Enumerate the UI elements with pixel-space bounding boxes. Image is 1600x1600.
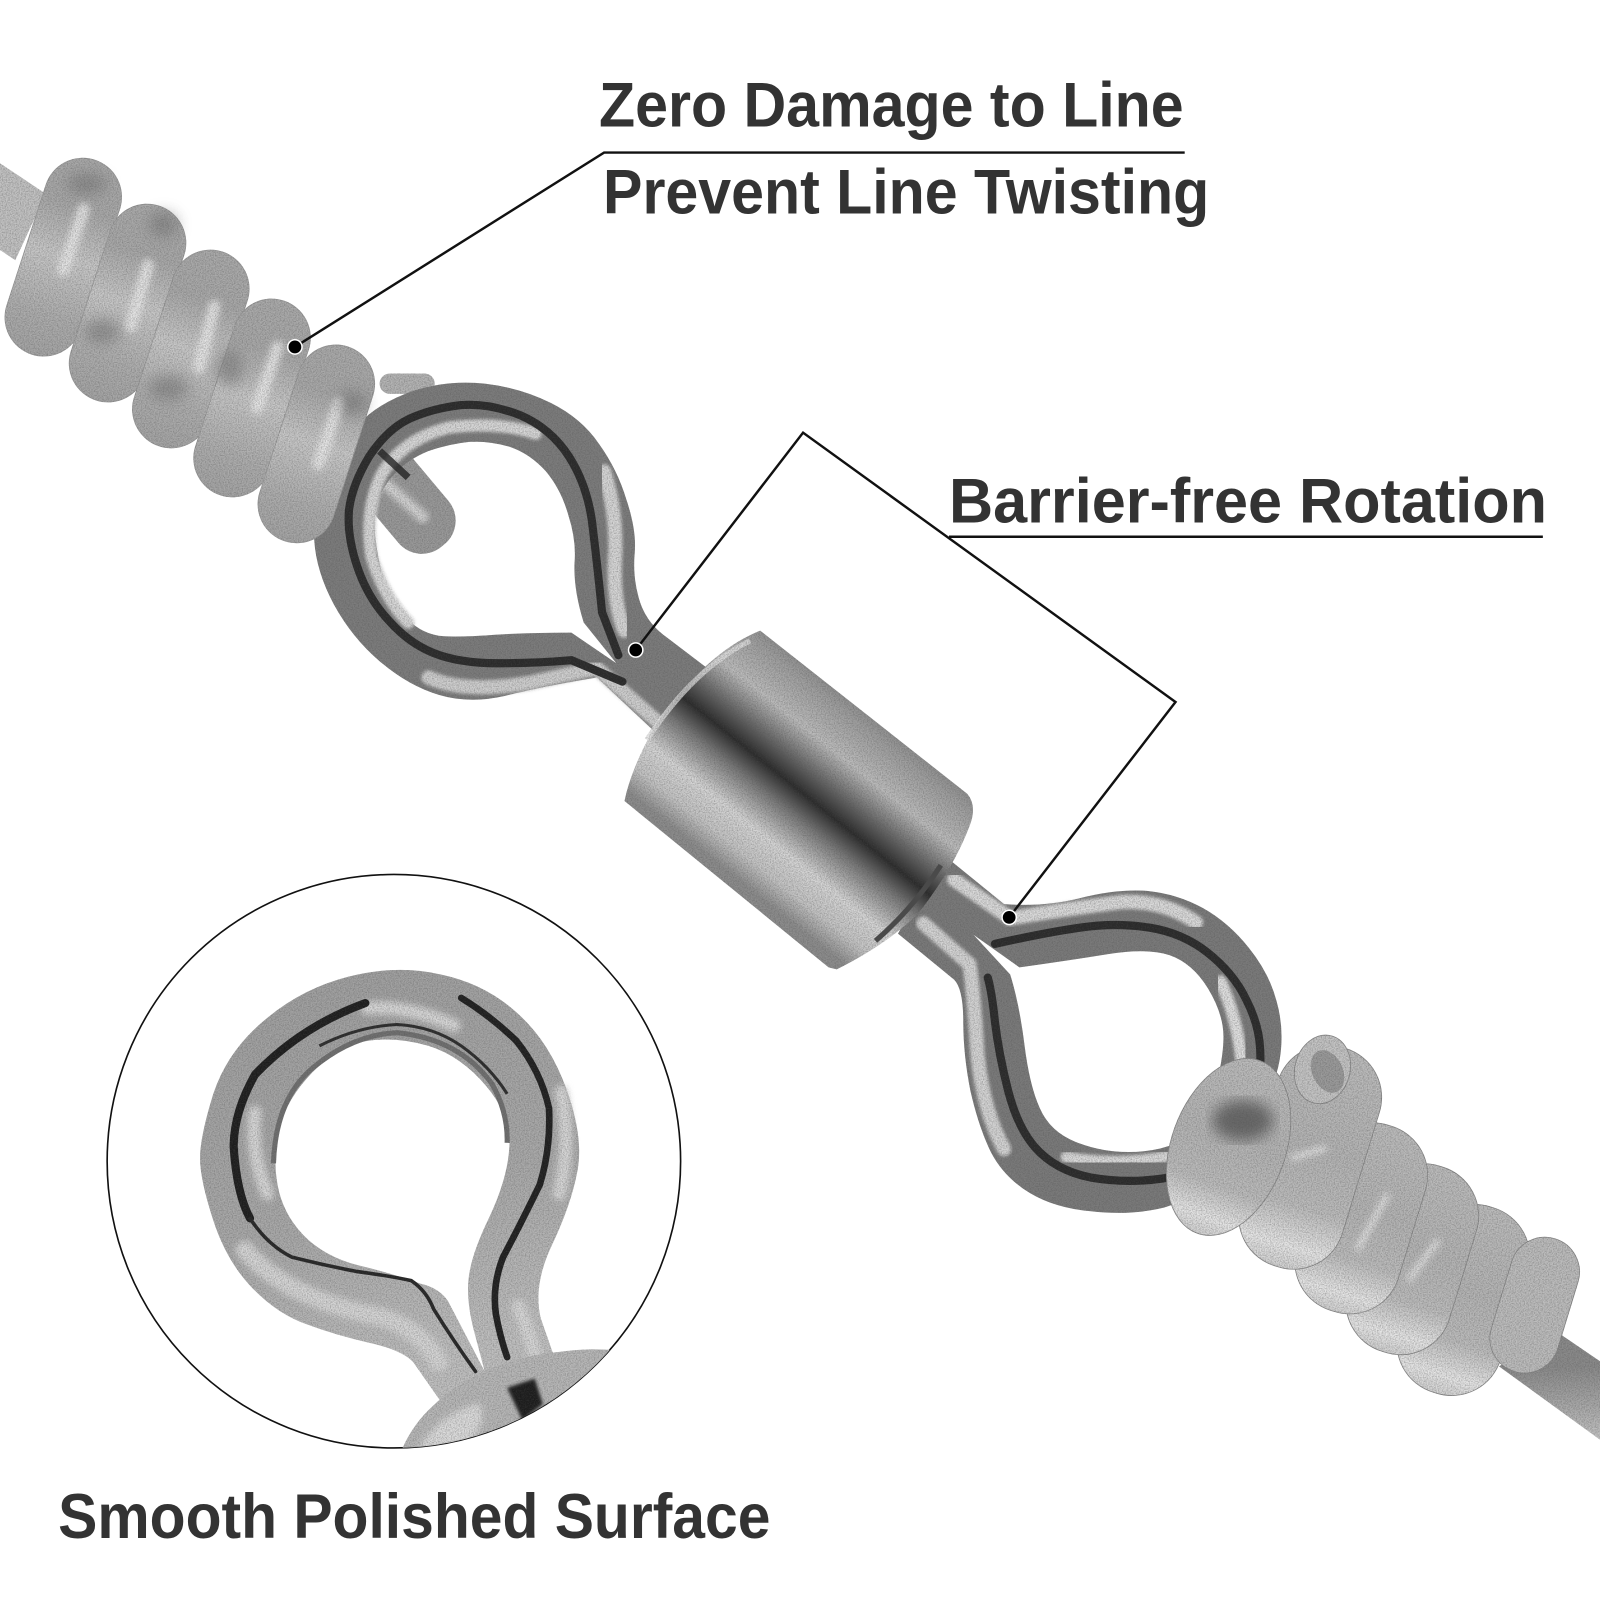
- inset circle outline: [107, 874, 681, 1448]
- bottom swivel eye: [898, 855, 1282, 1213]
- heading: barrier-free rotation: Barrier-free Rotation: [949, 466, 1547, 536]
- stopper stub behind top eye: [342, 373, 468, 566]
- top swivel eye: [314, 383, 714, 740]
- heading: prevent line twisting: Prevent Line Twisting: [603, 157, 1209, 227]
- heading: smooth polished surface: Smooth Polished Surface: [58, 1482, 770, 1552]
- close-up polished eye: [200, 970, 610, 1448]
- leader: barrier-free rotation bracket: [629, 433, 1543, 924]
- bottom stopper beads: [1143, 1029, 1600, 1440]
- leader: zero damage callout: [288, 153, 1185, 354]
- panel: inset circle close-up: [107, 874, 681, 1469]
- barrel: [624, 631, 973, 969]
- heading: zero damage to line: Zero Damage to Line: [599, 71, 1184, 141]
- top fishing line: [0, 163, 46, 260]
- top stopper beads: [0, 148, 385, 553]
